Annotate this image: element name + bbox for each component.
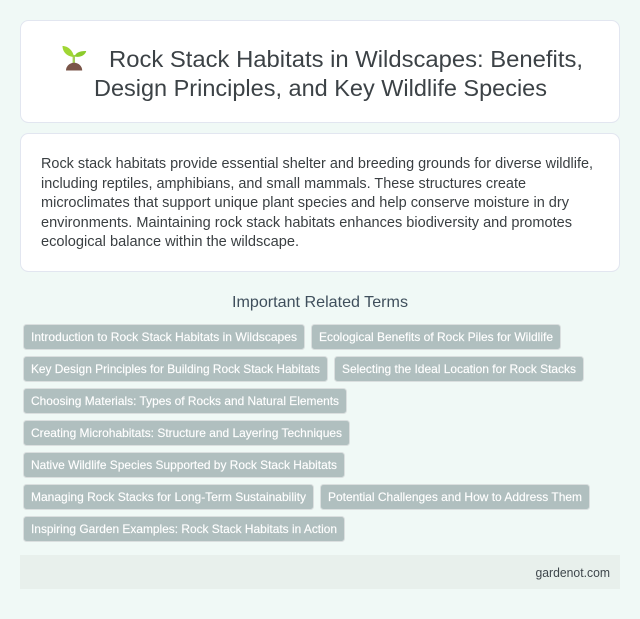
tag: native wildlife: Native Wildlife Species Supported by Rock Stack Habitats — [31, 458, 337, 472]
paragraph text: Rock stack habitats provide essential shelter and breeding grounds for diverse wildlife, — [41, 156, 593, 172]
icon: sprout emoji — [62, 46, 86, 70]
paragraph text — [41, 156, 593, 250]
title text — [94, 46, 583, 101]
paragraph text: ecological balance within the wildscape. — [41, 234, 299, 250]
tag: creating microhabitats: Creating Microhabitats: Structure and Layering Techniques — [31, 426, 342, 440]
title text: Rock Stack Habitats in Wildscapes: Benefits, — [109, 46, 583, 72]
paragraph text: microclimates that support unique plant species and help conserve moisture in dry — [41, 195, 570, 211]
tag: inspiring examples: Inspiring Garden Examples: Rock Stack Habitats in Action — [31, 522, 337, 536]
paragraph text: including reptiles, amphibians, and small mammals. These structures create — [41, 176, 526, 192]
panel: title card — [20, 20, 620, 122]
tag: choosing materials: Choosing Materials: Types of Rocks and Natural Elements — [31, 394, 339, 408]
tag: inspiring examples — [24, 516, 344, 542]
tag: selecting location: Selecting the Ideal Location for Rock Stacks — [342, 362, 576, 376]
tag: native wildlife — [24, 452, 344, 478]
tag: managing rock stacks — [24, 484, 314, 510]
tag: key design principles — [24, 356, 328, 382]
tag: key design principles: Key Design Principles for Building Rock Stack Habitats — [31, 362, 320, 376]
tag: selecting location — [334, 356, 584, 382]
title text: Design Principles, and Key Wildlife Species — [94, 75, 547, 101]
footer bar — [20, 555, 620, 589]
tag: managing rock stacks: Managing Rock Stacks for Long-Term Sustainability — [31, 490, 306, 504]
tag: potential challenges: Potential Challenges and How to Address Them — [328, 490, 582, 504]
tag: ecological benefits: Ecological Benefits of Rock Piles for Wildlife — [319, 330, 553, 344]
tag: creating microhabitats — [24, 420, 350, 446]
panel: related term tags — [24, 324, 590, 542]
footer text: gardenot.com — [536, 566, 610, 580]
tag: ecological benefits — [312, 324, 560, 350]
tag: introduction — [24, 324, 304, 350]
tag: choosing materials — [24, 388, 346, 414]
tag: potential challenges — [320, 484, 590, 510]
tag: introduction: Introduction to Rock Stack Habitats in Wildscapes — [31, 330, 297, 344]
panel: intro paragraph card — [20, 134, 620, 272]
paragraph text: environments. Maintaining rock stack habitats enhances biodiversity and promotes — [41, 215, 572, 231]
heading: important related terms: Important Related Terms — [232, 294, 408, 311]
